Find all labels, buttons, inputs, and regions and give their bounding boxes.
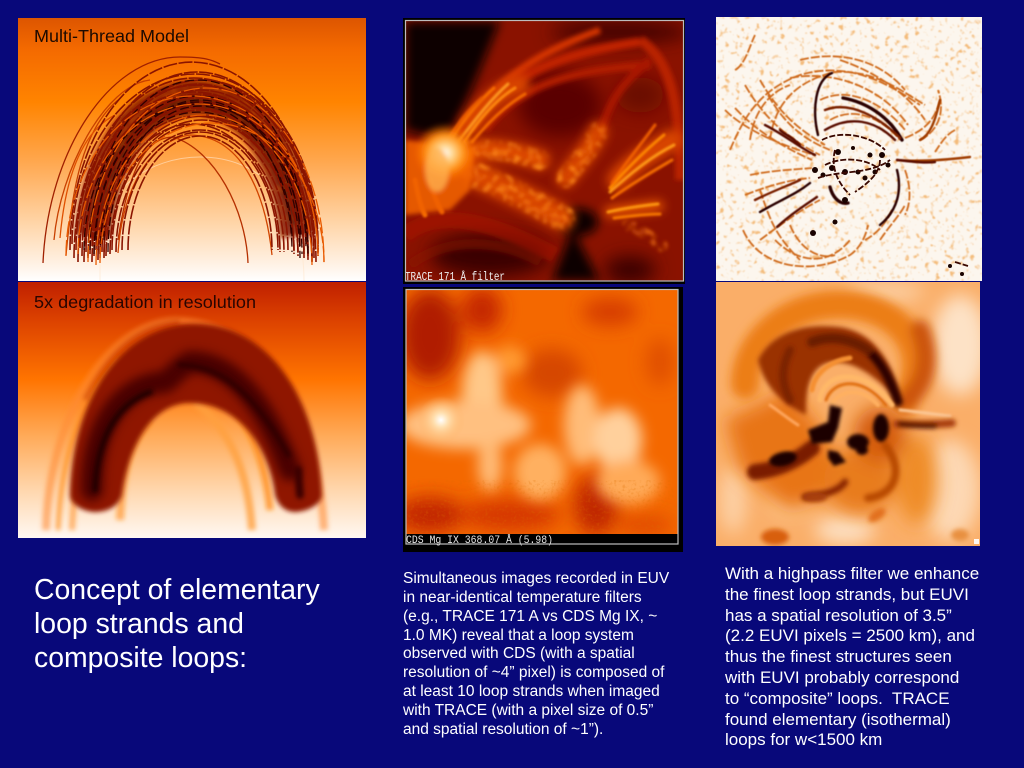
text block: simultaneous images: (e.g., TRACE 171 A vs CDS Mg IX, ~: [403, 608, 657, 625]
speckle noise: [716, 17, 982, 281]
text block: highpass filter: thus the finest structures seen: [725, 647, 952, 666]
text block: highpass filter: the finest loop strands, but EUVI: [725, 585, 969, 604]
panel: EUVI image: [716, 282, 988, 546]
pale zones: [719, 282, 988, 544]
sunspot blacks: [768, 405, 889, 469]
text block: simultaneous images: in near-identical temperature filters: [403, 589, 642, 606]
orange fields: [725, 390, 937, 524]
panel: TRACE image: [403, 18, 690, 284]
panel: multi-thread model: [18, 18, 366, 281]
text block: simultaneous images: observed with CDS (with a spatial: [403, 645, 635, 662]
heading: Multi-Thread Model: Multi-Thread Model: [34, 26, 189, 46]
dark streaks: [755, 423, 952, 498]
knot underglow: [450, 85, 672, 218]
text block: highpass filter: found elementary (isothermal): [725, 710, 951, 729]
outer single threads: [43, 57, 272, 263]
blurred composite loop: [70, 324, 322, 512]
pale outer strands: [46, 321, 324, 530]
panel: 5x degradation: [18, 282, 366, 538]
corner mark: [974, 539, 979, 544]
heading: concept of elementary loop strands: composite loops:: [34, 642, 247, 674]
dark core of loop: [92, 362, 290, 490]
text block: highpass filter: With a highpass filter we enhance: [725, 564, 979, 583]
fine bright fan strands: [415, 84, 674, 218]
caption bar: [406, 534, 678, 544]
knot strokes: [818, 135, 968, 266]
text block: highpass filter: [725, 564, 979, 749]
dark regions: [396, 288, 674, 535]
hub glow: [405, 123, 477, 215]
text block: simultaneous images: with TRACE (with a pixel size of 0.5”: [403, 702, 653, 719]
text block: simultaneous images: Simultaneous images recorded in EUV: [403, 570, 669, 587]
mottled bright knots: [450, 132, 662, 246]
text block: simultaneous images: [403, 570, 670, 738]
CDS hot spot: [424, 398, 455, 435]
panel: highpass EUVI image: [716, 17, 982, 281]
threads dark: [70, 62, 318, 262]
text block: simultaneous images: resolution of ~4” pixel) is composed of: [403, 664, 664, 681]
caption: CDS Mg IX: CDS Mg IX 368.07 Å (5.98): [406, 534, 553, 547]
text block: simultaneous images: at least 10 loop strands when imaged: [403, 683, 660, 700]
grain: [408, 480, 660, 532]
bright inner loops: [770, 358, 950, 425]
panel: CDS image: [396, 287, 683, 552]
heading: concept of elementary loop strands: [34, 574, 320, 674]
dark regions: [405, 21, 600, 281]
swirl core: [783, 338, 898, 402]
faint pale arc: [100, 157, 304, 281]
heading: concept of elementary loop strands: loop strands and: [34, 608, 244, 640]
text block: simultaneous images: and spatial resolution of ~1”).: [403, 721, 603, 738]
central knot: [810, 146, 964, 276]
threads orange: [66, 88, 324, 265]
thread bundle underlayer: [93, 98, 298, 236]
text block: highpass filter: (2.2 EUVI pixels = 2500 km), and: [725, 626, 975, 645]
caption: TRACE 171: TRACE 171 Å filter: [405, 271, 505, 284]
image panels: [18, 17, 982, 552]
heading: 5x degradation in resolution: 5x degradation in resolution: [34, 292, 256, 312]
text block: highpass filter: loops for w<1500 km: [725, 730, 882, 749]
bright areas: [399, 346, 660, 504]
band mottling: [93, 98, 298, 236]
outer swirl lobes: [745, 305, 926, 402]
text block: highpass filter: with EUVI probably correspond: [725, 668, 959, 687]
dark swirl: [758, 326, 902, 415]
darkest strands: [95, 365, 300, 495]
text block: highpass filter: to “composite” loops. TRACE: [725, 689, 950, 708]
bright and dark spots: [761, 492, 969, 545]
text block: simultaneous images: 1.0 MK) reveal that a loop system: [403, 627, 634, 644]
threads black: [84, 80, 308, 258]
text block: highpass filter: has a spatial resolution of 3.5”: [725, 606, 952, 625]
dark arc strands: [755, 73, 970, 227]
red loops: [405, 30, 680, 265]
heading: concept of elementary loop strands: Concept of elementary: [34, 574, 320, 606]
orange arc strands: [725, 35, 955, 266]
